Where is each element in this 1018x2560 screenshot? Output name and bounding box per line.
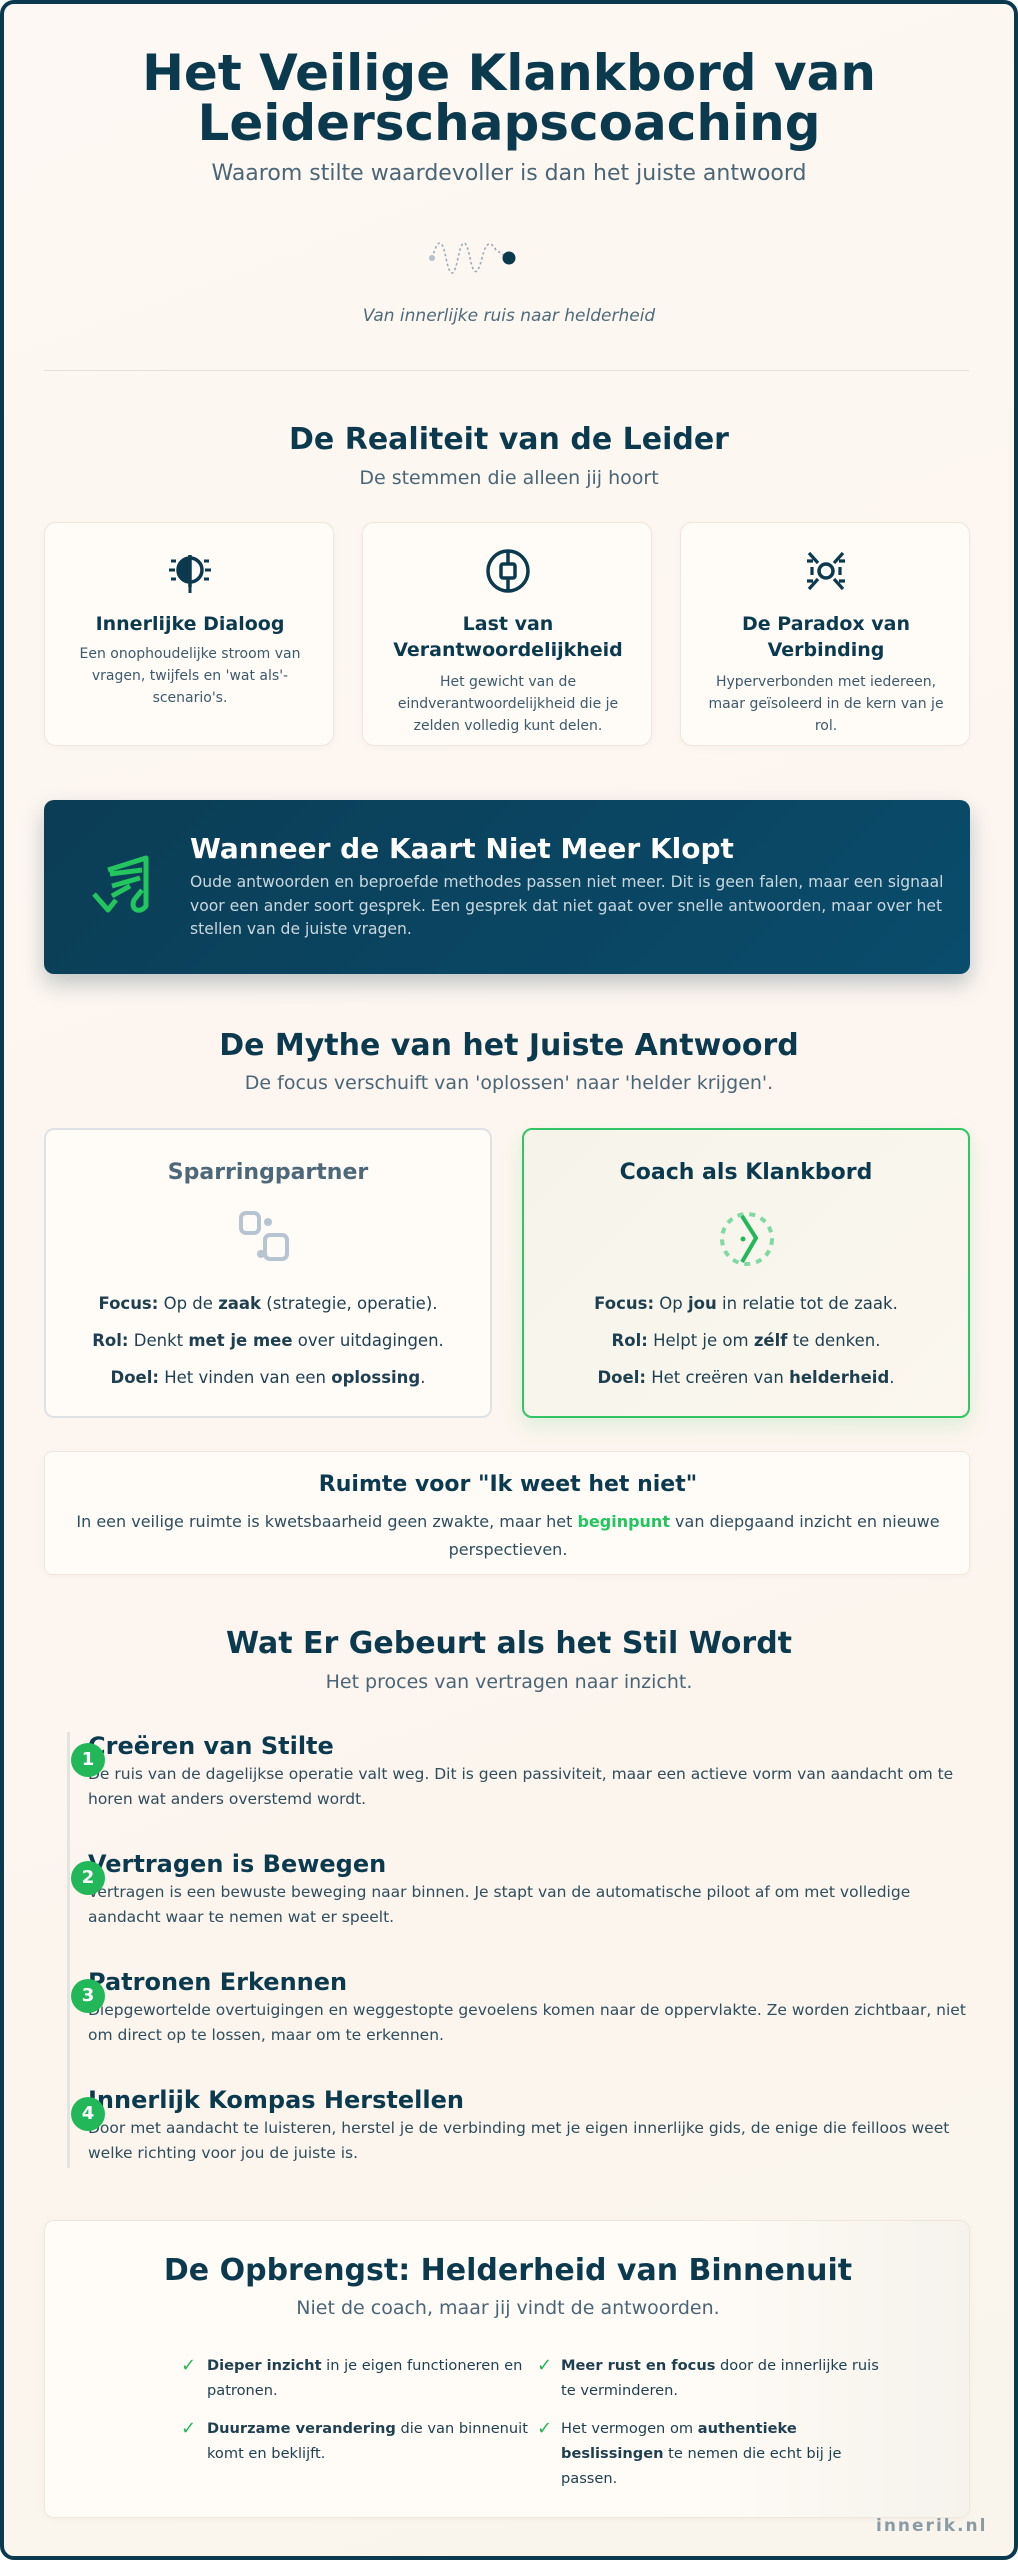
- panel: coach als klankbord: Doel: Het creëren van helderheid.: [597, 1368, 895, 1387]
- benefit 2: Meer rust en focus door de innerlijke ruis te verminderen.: [561, 2357, 879, 2399]
- benefit 4: Het vermogen om authentieke beslissingen te nemen die echt bij je passen.: [561, 2420, 841, 2487]
- card: paradox van verbinding: [680, 522, 970, 746]
- step 2: [88, 1850, 910, 1926]
- title: Het Veilige Klankbord van: [142, 44, 876, 102]
- banner title: Wanneer de Kaart Niet Meer Klopt: [190, 832, 734, 865]
- icon: dashed circle arrow: [720, 1212, 774, 1266]
- step 2: Vertragen is Bewegen: [88, 1850, 386, 1878]
- icon: isolation: [807, 552, 845, 590]
- panel: sparringpartner: [44, 1128, 492, 1418]
- step 4 number: 4: [82, 2103, 94, 2124]
- icon: brain/dialogue: [169, 555, 211, 593]
- benefit 1: Dieper inzicht in je eigen functioneren en patronen.: [207, 2357, 522, 2399]
- step 3: [88, 1968, 966, 2044]
- step 1: [88, 1732, 953, 1808]
- panel: opbrengst: ✓: [537, 2418, 552, 2439]
- timeline: [67, 1732, 966, 2168]
- title: Leiderschapscoaching: [197, 94, 821, 152]
- panel: coach als klankbord: Rol: Helpt je om zélf te denken.: [612, 1331, 880, 1350]
- panel: opbrengst: ✓: [181, 2418, 196, 2439]
- callout: ruimte voor ik weet het niet: Ruimte voor "Ik weet het niet": [319, 1472, 697, 1497]
- icon: noise to clarity wave: [429, 242, 516, 274]
- panel: opbrengst: [44, 2220, 970, 2518]
- step 3 number: [71, 1979, 105, 2013]
- step 2 number: 2: [82, 1867, 94, 1888]
- card: paradox van verbinding: De Paradox van: [742, 613, 910, 635]
- panel: sparringpartner: Focus: Op de zaak (strategie, operatie).: [98, 1294, 438, 1313]
- step 4 number: [71, 2097, 105, 2131]
- step 1: Creëren van Stilte: [88, 1732, 334, 1760]
- step 3: Patronen Erkennen: [88, 1968, 347, 1996]
- panel: coach als klankbord: Focus: Op jou in relatie tot de zaak.: [594, 1294, 898, 1313]
- card: last van verantwoordelijkheid: [362, 522, 652, 746]
- panel: coach als klankbord: [522, 1128, 970, 1418]
- step 4: Door met aandacht te luisteren, herstel je de verbinding met je eigen innerlijke gids, de enige die feilloos weet welke richting voor jou de juiste is.: [88, 2119, 949, 2162]
- card: last van verantwoordelijkheid: Het gewicht van de eindverantwoordelijkheid die je zelden volledig kunt delen.: [398, 674, 618, 734]
- panel: sparringpartner: Sparringpartner: [168, 1160, 368, 1185]
- benefit 3: Duurzame verandering die van binnenuit komt en beklijft.: [207, 2420, 528, 2462]
- step 1: De ruis van de dagelijkse operatie valt weg. Dit is geen passiviteit, maar een actieve vorm van aandacht om te horen wat anders overstemd wordt.: [88, 1765, 953, 1808]
- card: last van verantwoordelijkheid: Verantwoordelijkheid: [393, 639, 623, 661]
- section heading: mythe: De Mythe van het Juiste Antwoord: [219, 1028, 799, 1063]
- section subtitle: De stemmen die alleen jij hoort: [359, 467, 659, 489]
- step 3 number: 3: [82, 1985, 94, 2006]
- step 4: Innerlijk Kompas Herstellen: [88, 2086, 464, 2114]
- panel: opbrengst: ✓: [537, 2355, 552, 2376]
- card: last van verantwoordelijkheid: Last van: [463, 613, 553, 635]
- step 4: [88, 2086, 949, 2162]
- panel: sparringpartner: Doel: Het vinden van een oplossing.: [110, 1368, 425, 1387]
- caption: Van innerlijke ruis naar helderheid: [363, 306, 655, 326]
- panel: opbrengst: Niet de coach, maar jij vindt de antwoorden.: [296, 2297, 720, 2319]
- callout: ruimte voor ik weet het niet: [44, 1451, 970, 1575]
- icon: broken map: [92, 856, 148, 913]
- banner: wanneer de kaart niet meer klopt: [44, 800, 970, 974]
- card: paradox van verbinding: Verbinding: [768, 639, 884, 661]
- section heading: wat er gebeurt: Wat Er Gebeurt als het Stil Wordt: [226, 1626, 792, 1661]
- step 1 number: [71, 1743, 105, 1777]
- card: innerlijke dialoog: [44, 522, 334, 746]
- card: innerlijke dialoog: Innerlijke Dialoog: [96, 613, 284, 635]
- panel: opbrengst: ✓: [181, 2355, 196, 2376]
- section subtitle: De focus verschuift van 'oplossen' naar 'helder krijgen'.: [245, 1072, 773, 1094]
- step 1 number: 1: [82, 1749, 94, 1770]
- panel: coach als klankbord: Coach als Klankbord: [620, 1160, 872, 1185]
- section subtitle: Het proces van vertragen naar inzicht.: [326, 1671, 692, 1693]
- step 2: Vertragen is een bewuste beweging naar binnen. Je stapt van de automatische piloot af om met volledige aandacht waar te nemen wat er speelt.: [88, 1883, 910, 1926]
- title: [142, 44, 876, 152]
- callout: ruimte voor ik weet het niet: In een veilige ruimte is kwetsbaarheid geen zwakte, maar het beginpunt van diepgaand inzicht en nieuwe perspectieven.: [76, 1512, 940, 1559]
- footer brand: innerik.nl: [876, 2516, 987, 2536]
- section heading: realiteit: De Realiteit van de Leider: [289, 422, 729, 457]
- step 2 number: [71, 1861, 105, 1895]
- icon: two blocks: [239, 1211, 289, 1261]
- subtitle: Waarom stilte waardevoller is dan het juiste antwoord: [211, 161, 807, 186]
- banner text: Oude antwoorden en beproefde methodes passen niet meer. Dit is geen falen, maar een signaal voor een ander soort gesprek. Een gesprek dat niet gaat over snelle antwoorden, maar over het stellen van de juiste vragen.: [190, 873, 944, 938]
- panel: opbrengst: De Opbrengst: Helderheid van Binnenuit: [164, 2253, 852, 2288]
- panel: sparringpartner: Rol: Denkt met je mee over uitdagingen.: [92, 1331, 444, 1350]
- step 3: Diepgewortelde overtuigingen en weggestopte gevoelens komen naar de oppervlakte. Ze worden zichtbaar, niet om direct op te lossen, maar om te erkennen.: [88, 2001, 966, 2044]
- card: innerlijke dialoog: Een onophoudelijke stroom van vragen, twijfels en 'wat als'-scenario's.: [79, 646, 300, 706]
- icon: weight: [486, 549, 530, 593]
- card: paradox van verbinding: Hyperverbonden met iedereen, maar geïsoleerd in de kern van je rol.: [708, 674, 944, 734]
